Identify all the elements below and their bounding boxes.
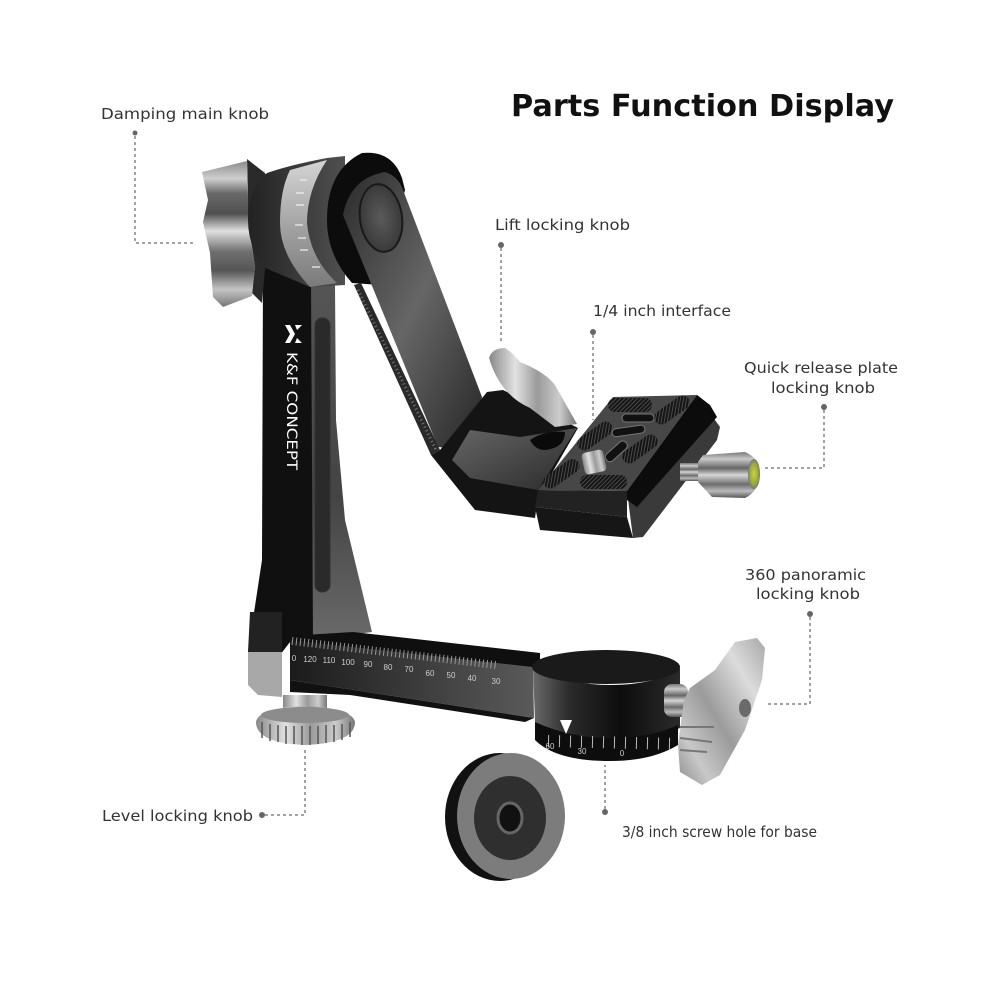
arm cap bbox=[355, 181, 407, 255]
bracket tray bbox=[452, 428, 577, 490]
dial numbers: 30 bbox=[578, 747, 587, 756]
ruler numbers: 30 bbox=[492, 677, 501, 686]
ruler ticks bbox=[292, 641, 496, 665]
bubble level bbox=[748, 459, 760, 489]
vertical column bbox=[248, 268, 313, 655]
ring tick marks bbox=[295, 180, 320, 267]
ruler numbers: 50 bbox=[447, 671, 456, 680]
dial numbers: 0 bbox=[620, 749, 625, 758]
label: lift locking knob: Lift locking knob bbox=[495, 216, 630, 234]
silver scale ring bbox=[280, 160, 337, 287]
dial numbers bbox=[546, 742, 625, 758]
label: quarter inch interface: 1/4 inch interface bbox=[593, 302, 731, 320]
plate screw bbox=[581, 449, 607, 475]
disc face bbox=[457, 753, 565, 879]
label: 360 panoramic locking knob: 360 panoramic bbox=[745, 566, 866, 584]
label: quick release plate locking knob bbox=[744, 359, 898, 468]
disc inner bbox=[474, 776, 546, 860]
ruler numbers: 0 bbox=[292, 654, 297, 663]
slanted arm bbox=[343, 172, 482, 450]
plate slots bbox=[604, 414, 654, 463]
label: lift locking knob bbox=[495, 216, 630, 343]
column gray gusset bbox=[311, 283, 372, 640]
damping main knob bbox=[202, 161, 255, 307]
ruler numbers: 120 bbox=[303, 655, 317, 664]
plate front edge bbox=[535, 490, 627, 517]
label: 360 panoramic locking knob bbox=[745, 566, 866, 704]
label: level locking knob bbox=[102, 750, 305, 825]
label: 360 panoramic locking knob: locking knob bbox=[756, 585, 860, 603]
ruler numbers: 70 bbox=[405, 665, 414, 674]
level knob knurling bbox=[262, 722, 350, 745]
disc side bbox=[445, 753, 555, 881]
title: Parts Function Display bbox=[511, 89, 894, 124]
arm scale ticks bbox=[358, 290, 436, 450]
level locking knob bbox=[256, 706, 355, 745]
label: 3/8 inch screw hole for base: 3/8 inch screw hole for base bbox=[622, 823, 817, 841]
label: quarter inch interface bbox=[590, 302, 731, 420]
label: level locking knob: Level locking knob bbox=[102, 807, 253, 825]
dial pointer bbox=[560, 720, 572, 734]
bottom arm ruler bbox=[290, 640, 534, 718]
ruler numbers bbox=[292, 654, 501, 686]
base left block upper bbox=[248, 612, 282, 652]
upper black hub bbox=[327, 153, 405, 285]
ruler numbers: 90 bbox=[364, 660, 373, 669]
plate grip pads bbox=[541, 393, 692, 491]
head top bbox=[532, 650, 680, 684]
knob dark back bbox=[247, 159, 272, 303]
level knob stem bbox=[283, 695, 327, 711]
column slot bbox=[315, 318, 330, 592]
label: quick release plate locking knob: Quick release plate bbox=[744, 359, 898, 377]
right knob stem bbox=[680, 463, 702, 481]
label: 3/8 inch screw hole for base bbox=[602, 765, 817, 841]
top collar bbox=[248, 156, 345, 287]
product: gimbal head bbox=[202, 153, 765, 785]
plate side rail bbox=[627, 395, 720, 538]
base disc bbox=[445, 753, 565, 881]
clamp lower body bbox=[535, 507, 633, 538]
bottom arm top bbox=[288, 632, 540, 668]
quick release plate bbox=[538, 395, 697, 491]
brand name: K&F CONCEPT bbox=[283, 352, 299, 470]
rotating base head bbox=[533, 668, 680, 742]
degree dial bbox=[535, 722, 678, 761]
dial numbers: 60 bbox=[546, 742, 555, 751]
panoramic knob stem bbox=[664, 684, 688, 717]
ruler numbers: 40 bbox=[468, 674, 477, 683]
label: damping main knob bbox=[101, 105, 269, 243]
ruler underside bbox=[290, 680, 534, 722]
base left block silver bbox=[248, 652, 282, 697]
arm scale bbox=[354, 283, 440, 455]
ruler numbers: 60 bbox=[426, 669, 435, 678]
ruler numbers: 80 bbox=[384, 663, 393, 672]
wing hole bbox=[739, 699, 751, 717]
lift locking knob bbox=[489, 348, 577, 427]
plate rail groove bbox=[627, 395, 717, 507]
level knob top bbox=[261, 707, 349, 723]
label: quick release plate locking knob: locking knob bbox=[771, 379, 875, 397]
label: damping main knob: Damping main knob bbox=[101, 105, 269, 123]
bracket back bbox=[431, 390, 578, 518]
360 panoramic locking wing knob bbox=[678, 638, 765, 785]
quick release locking knob barrel bbox=[698, 452, 760, 498]
wing knob ridges bbox=[680, 727, 714, 752]
screw hole bbox=[498, 803, 522, 833]
dial ticks bbox=[548, 741, 678, 744]
brand logo bbox=[285, 325, 302, 343]
ruler numbers: 110 bbox=[323, 656, 336, 665]
ruler numbers: 100 bbox=[341, 658, 355, 667]
bracket slot bbox=[530, 432, 565, 450]
